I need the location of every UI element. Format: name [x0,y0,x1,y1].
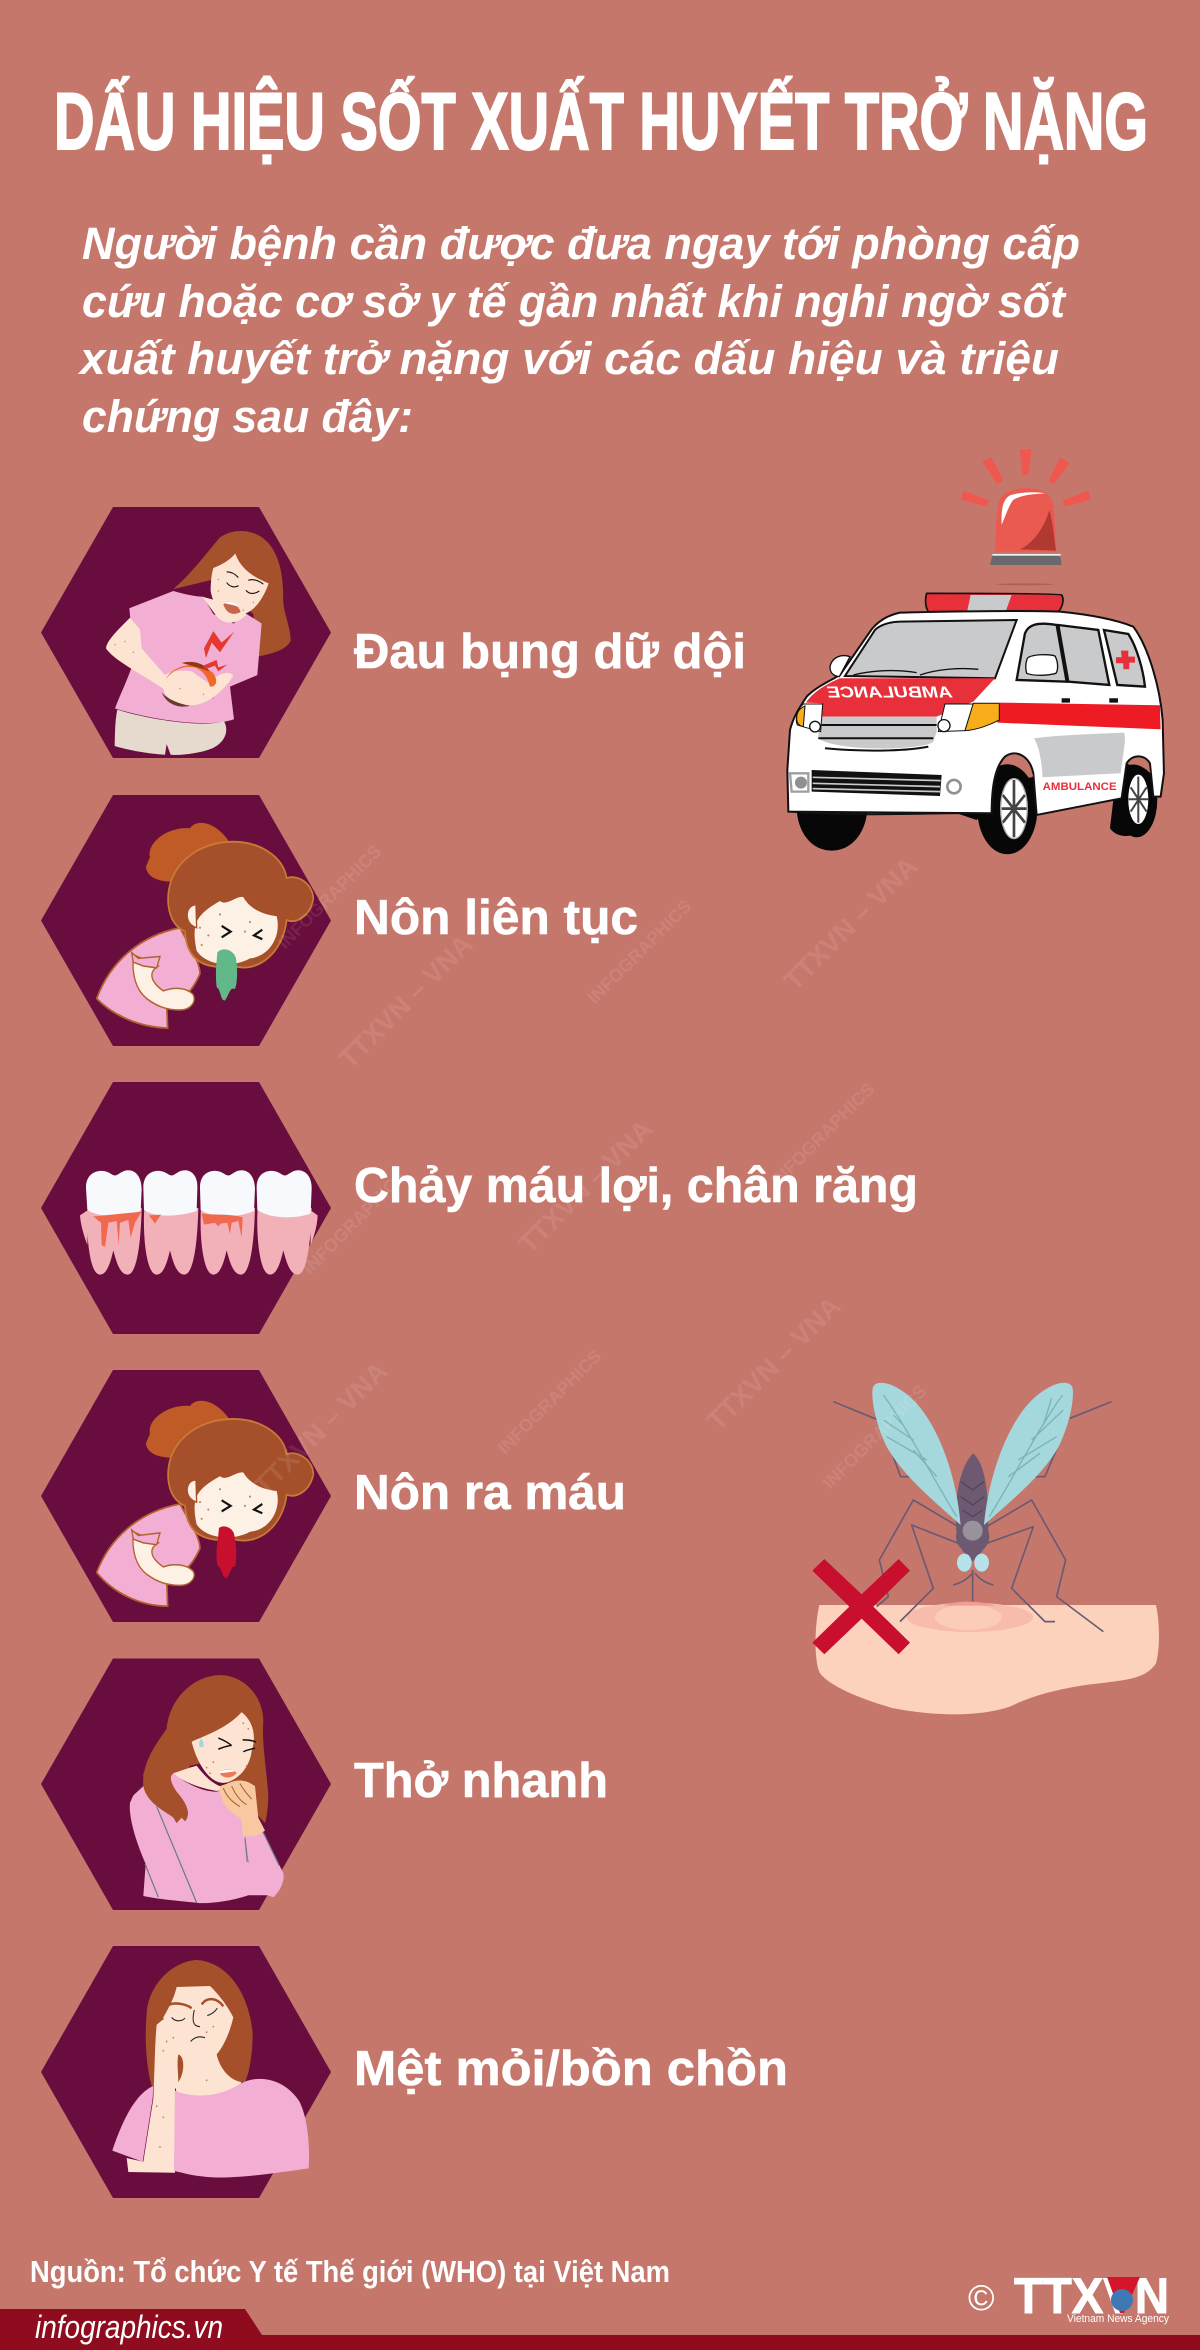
watermarks: TTXVN – VNA [333,929,478,1074]
icon: girl coughing [130,1675,284,1903]
footer bar with site tab [0,2309,1200,2350]
watermarks: TTXVN – VNA [701,1291,846,1436]
label: abdominal pain: Đau bụng dữ dội [354,625,746,679]
label: continuous vomiting: Nôn liên tục [354,891,638,945]
hexagon panel: continuous vomiting [41,795,331,1046]
logo: TTXVN: © [968,2277,995,2318]
icon: ambulance: AMBULANCE [827,684,954,701]
watermarks: INFOGRAPHICS [584,896,695,1008]
intro text: chứng sau đây: [82,391,413,442]
hexagon panel: fatigue, restlessness [41,1946,331,2198]
icon: girl vomiting blood [97,1401,313,1606]
watermarks: INFOGRAPHICS [767,1079,878,1191]
intro text: Người bệnh cần được đưa ngay tới phòng cấp [82,218,1080,269]
icon: girl holding stomach [106,531,291,755]
watermarks: INFOGRAPHICS [819,1381,930,1493]
watermarks: TTXVN – VNA [248,1356,393,1501]
footer bar with site tab: infographics.vn [35,2309,223,2345]
icon: ambulance [787,593,1164,854]
watermarks: INFOGRAPHICS [299,1166,410,1278]
logo: TTXVN: TTXVN [1014,2268,1169,2324]
icon: teeth with bleeding gums [80,1170,318,1275]
icon: siren beacon [961,449,1091,585]
watermarks: TTXVN – VNA [778,851,923,996]
hexagon panel: rapid breathing [41,1658,331,1910]
logo: TTXVN: Vietnam News Agency [1067,2313,1169,2325]
watermarks: INFOGRAPHICS [274,841,385,953]
label: rapid breathing: Thở nhanh [354,1754,608,1808]
icon: mosquito biting skin [812,1383,1159,1714]
label: vomiting blood: Nôn ra máu [354,1466,626,1520]
watermarks: TTXVN – VNA [513,1114,658,1259]
hexagon panel: abdominal pain [41,507,331,758]
hexagon panel: bleeding gums [41,1082,331,1334]
icon: tired woman holding face [112,1960,309,2178]
label: fatigue, restlessness: Mệt mỏi/bồn chồn [354,2042,788,2096]
label: bleeding gums: Chảy máu lợi, chân răng [354,1159,918,1213]
icon: ambulance: AMBULANCE [1043,781,1117,793]
source note: Nguồn: Tổ chức Y tế Thế giới (WHO) tại Việt Nam [30,2254,670,2289]
hexagon panel: vomiting blood [41,1370,331,1622]
red cross mark [812,1559,910,1654]
intro text: xuất huyết trở nặng với các dấu hiệu và triệu [78,333,1059,384]
intro text: cứu hoặc cơ sở y tế gần nhất khi nghi ngờ sốt [82,276,1067,327]
skin [816,1605,1159,1714]
watermarks: INFOGRAPHICS [494,1346,605,1458]
icon: girl vomiting green [97,823,313,1028]
watermarks [248,841,930,1501]
intro text [78,218,1080,442]
